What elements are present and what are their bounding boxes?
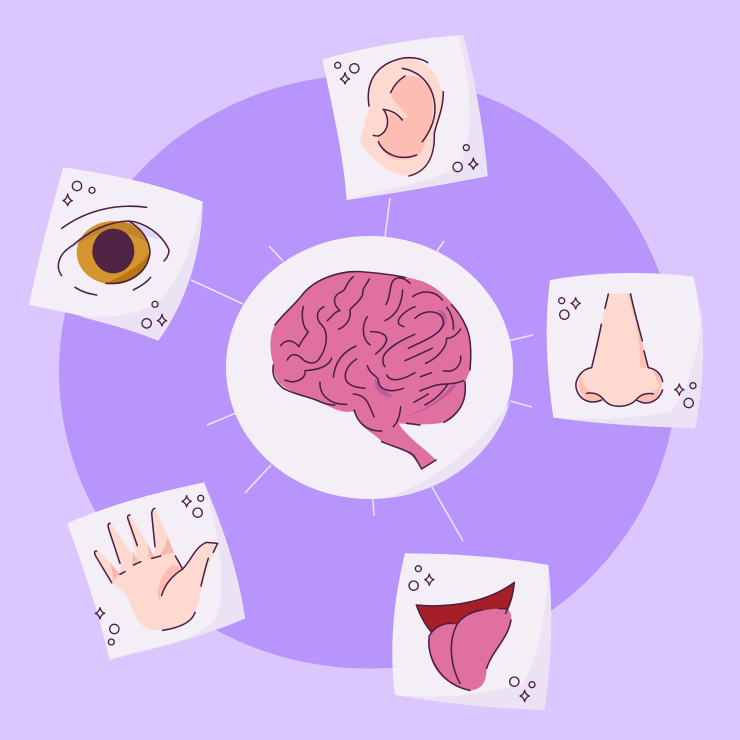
- card: nose: [547, 273, 703, 428]
- card: hand: [67, 482, 245, 660]
- sparkles: [409, 566, 535, 702]
- connector spokes: [191, 198, 533, 541]
- sparkles: [95, 495, 204, 645]
- icon: nose: [576, 293, 663, 406]
- icon: hand: [95, 508, 218, 630]
- card: ear: [322, 35, 488, 200]
- sparkles: [335, 62, 478, 172]
- icon: tongue and mouth: [416, 582, 514, 690]
- purple central circle: [59, 74, 677, 668]
- icon: brain: [270, 272, 471, 469]
- icon: eye: [58, 206, 169, 295]
- brain outline and folds: [273, 272, 471, 469]
- sparkles: [559, 298, 696, 408]
- sparkles: [63, 181, 167, 328]
- icon: ear: [360, 58, 443, 176]
- brain circle panel: [226, 236, 513, 499]
- card: eye: [29, 167, 203, 341]
- card: tongue: [392, 553, 551, 710]
